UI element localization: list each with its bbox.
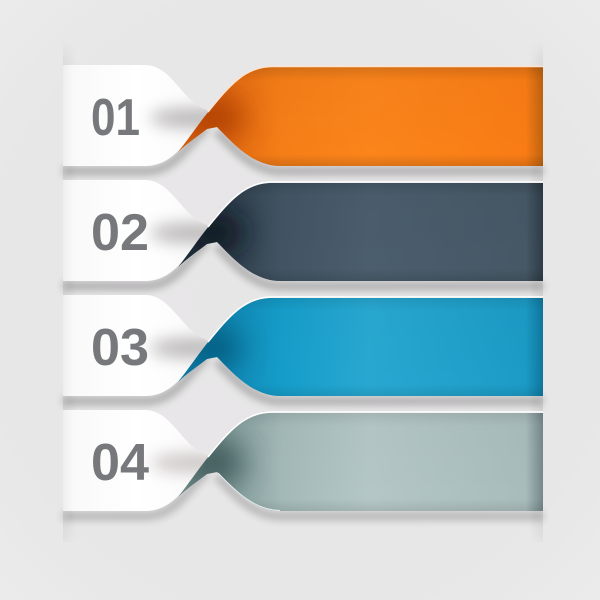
white tab	[63, 180, 208, 281]
number 03: 03	[91, 319, 149, 377]
colored band	[170, 297, 543, 396]
colored band	[170, 182, 543, 281]
white tab	[63, 410, 208, 511]
ribbon 4	[63, 410, 543, 516]
colored band	[170, 66, 543, 166]
shadow	[63, 358, 543, 401]
shadow	[63, 473, 543, 516]
ribbon 2	[63, 180, 543, 286]
shadow	[63, 243, 543, 286]
white tab	[63, 65, 208, 166]
number 04: 04	[91, 434, 149, 492]
colored band	[170, 412, 543, 511]
backing panel edges	[63, 42, 543, 542]
ribbon 3	[63, 295, 543, 401]
number 02: 02	[91, 204, 149, 262]
ribbon 1	[63, 65, 543, 171]
shadow	[63, 128, 543, 171]
number 01: 01	[91, 89, 140, 147]
white tab	[63, 295, 208, 396]
